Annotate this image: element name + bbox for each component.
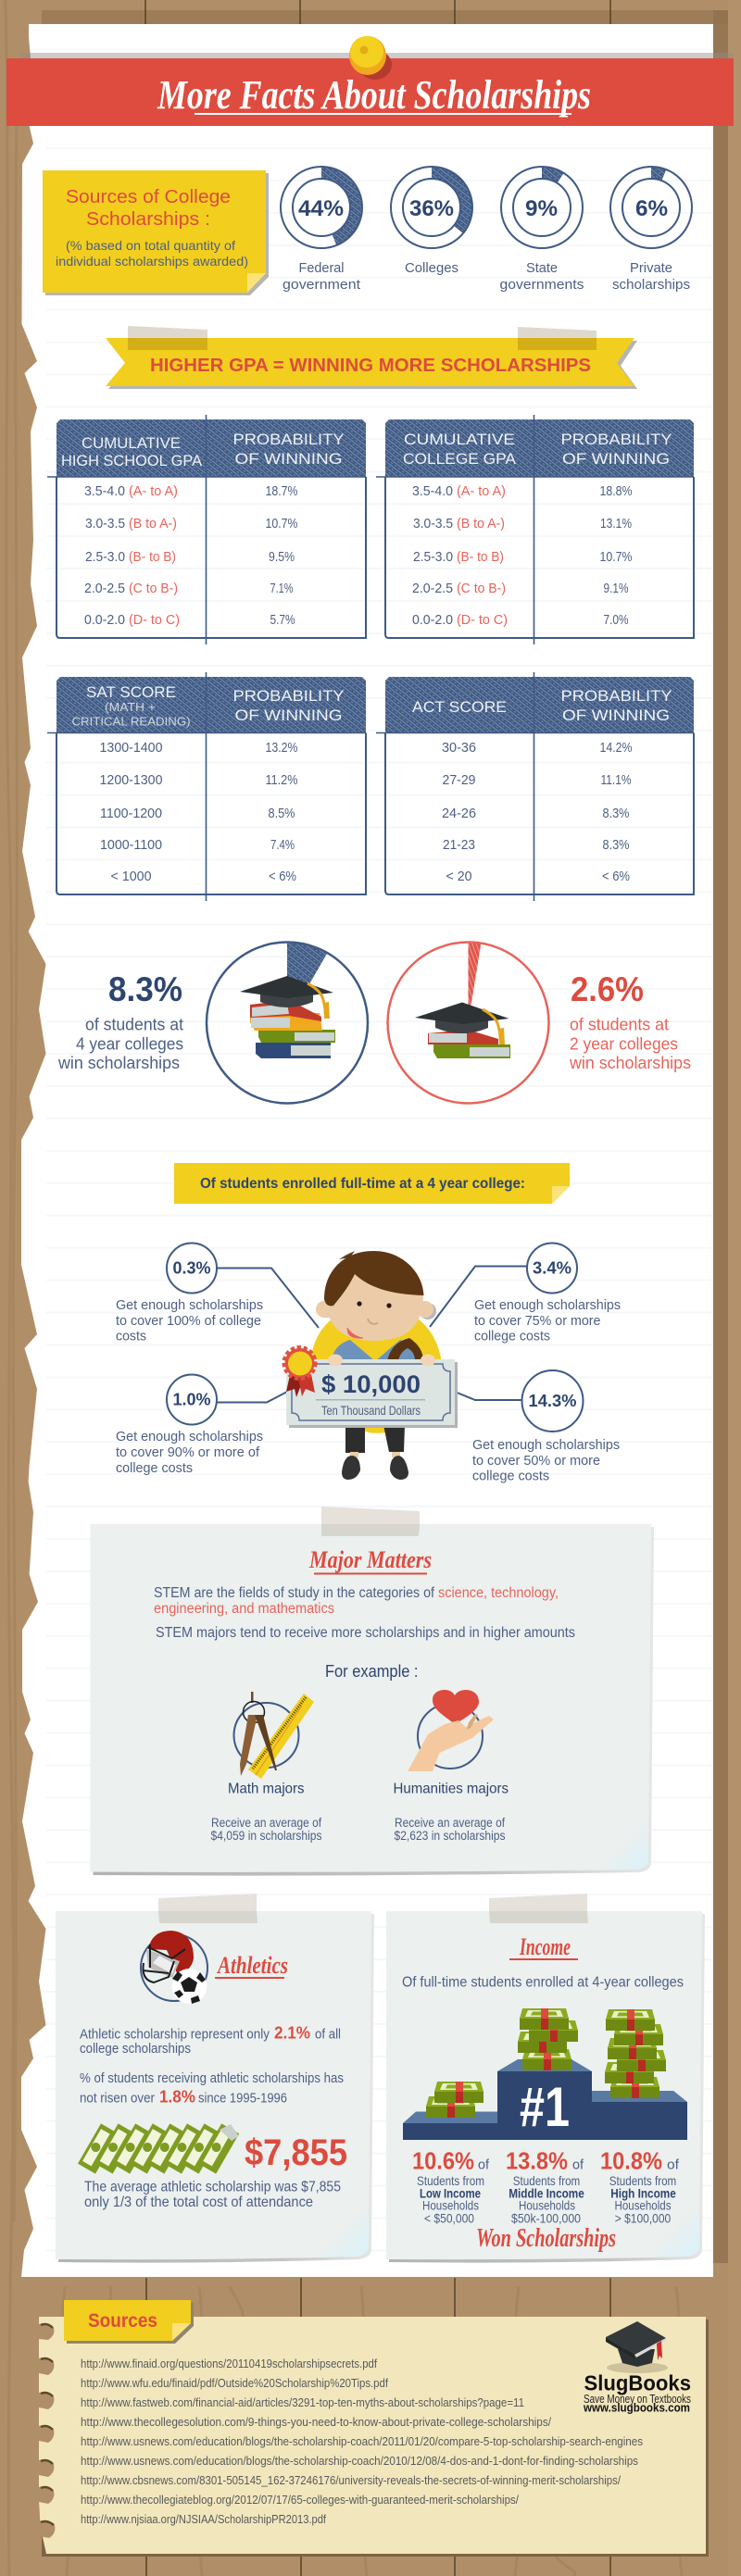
table: high school GPA: 2.0-2.5 — [84, 581, 125, 596]
text: humanities average — [395, 1816, 506, 1843]
stat: low income 10.6%: Low Income — [420, 2185, 481, 2200]
text: 2.1% of all scholarships: college scholarships — [80, 2042, 191, 2057]
table: ACT score: 27-29 — [443, 772, 476, 788]
source list: http://www.usnews.com/education/blogs/the-scholarship-coach/2010/12/08/4-dos-and-1-dont-for-finding-scholarships — [81, 2455, 638, 2468]
stat: middle income 13.8%: $50k-100,000 — [511, 2211, 581, 2226]
stat: high income 10.8%: Households — [615, 2198, 671, 2213]
logo: SlugBooks — [583, 2321, 691, 2415]
table: SAT score: OF WINNING — [235, 707, 343, 724]
table: SAT score: < 1000 — [111, 869, 152, 884]
stat: high income 10.8%: Students from — [609, 2173, 676, 2188]
logo: SlugBooks: SlugBooks — [584, 2370, 691, 2395]
callout: 14.3%: Get enough scholarships — [472, 1438, 620, 1453]
sources tag — [64, 2300, 194, 2344]
stat: middle income 13.8%: 13.8% — [506, 2146, 568, 2174]
table: high school GPA: 0.0-2.0 — [84, 612, 125, 628]
stat: high income 10.8%: > $100,000 — [615, 2211, 671, 2226]
stat: low income 10.6%: < $50,000 — [424, 2211, 474, 2226]
table: high school GPA: 3.5-4.0 — [84, 483, 125, 499]
table: high school GPA: HIGH SCHOOL GPA — [61, 452, 203, 469]
text: math average: Receive an average of — [211, 1816, 321, 1830]
text: not risen over 1.8%: not risen over — [80, 2091, 155, 2106]
table: college GPA: (B to A-) — [457, 516, 505, 531]
table: SAT score: 7.4% — [270, 837, 295, 853]
callout: 14.3%: 14.3% — [528, 1392, 576, 1410]
donut: federal government 44%: Federal — [298, 260, 345, 276]
text: average athletic scholarship: only 1/3 of the total cost of attendance — [84, 2195, 313, 2210]
stat: low income 10.6%: Students from — [417, 2173, 484, 2188]
table: college GPA: COLLEGE GPA — [403, 450, 517, 468]
stat: 8.3% of students at 4 year colleges: 8.3% — [108, 970, 182, 1008]
text: 2.1% of all scholarships: of all — [315, 2028, 341, 2043]
donut: private scholarships 6%: scholarships — [612, 277, 690, 293]
table: ACT score: 30-36 — [442, 740, 476, 756]
donut: colleges 36%: Colleges — [405, 260, 458, 276]
callout: 14.3%: to cover 50% or more — [472, 1454, 600, 1469]
donut: federal government 44% — [281, 167, 362, 293]
heading note: students enrolled full-time: Of students enrolled full-time at a 4 year college: — [200, 1176, 525, 1192]
table: ACT score: PROBABILITY — [561, 687, 672, 705]
callout: 1.0%: college costs — [116, 1461, 193, 1476]
pie: 4 year colleges with cap and books — [207, 942, 368, 1104]
table: SAT score: 13.2% — [265, 740, 298, 756]
text: not risen over 1.8%: % of students receiving athletic scholarships has — [80, 2071, 344, 2086]
table: ACT score — [376, 672, 694, 901]
panel: major matters — [91, 1507, 654, 1876]
table: high school GPA: (A- to A) — [129, 483, 178, 499]
callout: 1.0%: to cover 90% or more of — [116, 1445, 260, 1460]
stat: 2.6% of students at 2 year colleges: 2 year colleges — [570, 1035, 678, 1054]
table: high school GPA: (D- to C) — [129, 612, 180, 628]
table: high school GPA: (B to A-) — [129, 516, 177, 531]
text: humanities average: $2,623 in scholarships — [395, 1829, 506, 1843]
callout: 3.4%: college costs — [474, 1330, 550, 1344]
table: college GPA: 7.0% — [604, 612, 628, 628]
icon: two stacked books — [428, 1030, 510, 1058]
text: not risen over 1.8%: 1.8% — [159, 2087, 195, 2106]
stat: middle income 13.8%: Students from — [513, 2173, 580, 2188]
table: college GPA: 2.0-2.5 — [412, 581, 453, 596]
stat: middle income 13.8%: Middle Income — [509, 2185, 584, 2200]
icon: award ribbon — [285, 1348, 315, 1397]
table: ACT score: 8.3% — [602, 806, 630, 821]
table: high school GPA: PROBABILITY — [233, 431, 345, 448]
table: SAT score: 1000-1100 — [100, 837, 162, 853]
table: college GPA: (C to B-) — [457, 581, 506, 596]
table: SAT score: (MATH + — [105, 700, 156, 714]
illustration: student holding $10,000 check — [285, 1251, 458, 1480]
source list: http://www.wfu.edu/finaid/pdf/Outside%20Scholarship%20Tips.pdf — [81, 2377, 388, 2390]
note text: (% based on total quantity of — [66, 238, 235, 253]
label: math majors: Math majors — [228, 1782, 304, 1796]
panel: athletics — [56, 1894, 374, 2263]
STEM text: STEM are the fields of study in the categories of — [154, 1585, 435, 1601]
icon: compass and ruler — [233, 1692, 314, 1779]
subheading: Of full-time students enrolled at 4-year colleges — [402, 1974, 684, 1991]
stat: high income 10.8% — [600, 2146, 680, 2226]
callout: 0.3%: Get enough scholarships — [116, 1298, 263, 1313]
panel: sources of college scholarships note: Scholarships : — [86, 209, 210, 230]
table: college GPA: 3.0-3.5 — [413, 516, 453, 531]
table: SAT score: CRITICAL READING) — [72, 715, 191, 728]
icon: football helmet and soccer ball — [141, 1931, 207, 2004]
table: ACT score: 21-23 — [443, 837, 475, 853]
text: math average — [211, 1816, 322, 1843]
table: ACT score: 24-26 — [442, 806, 476, 821]
source list: http://www.njsiaa.org/NJSIAA/ScholarshipPR2013.pdf — [81, 2513, 326, 2526]
table: college GPA: PROBABILITY — [561, 431, 672, 448]
check: $ 10,000 — [321, 1370, 421, 1398]
table: high school GPA: 3.0-3.5 — [85, 516, 125, 531]
source list: http://www.thecollegiateblog.org/2012/07/17/65-colleges-with-guaranteed-merit-scholarships/ — [81, 2494, 519, 2507]
table: high school GPA: (B- to B) — [129, 549, 176, 565]
stat: 8.3% of students at 4 year colleges: of students at — [85, 1015, 183, 1033]
icon: fanned dollar bills — [78, 2123, 239, 2174]
table: high school GPA: 18.7% — [265, 483, 298, 499]
stat: low income 10.6%: Households — [422, 2198, 479, 2213]
panel: major matters: science, technology, — [438, 1585, 559, 1601]
icon: yellow push pin — [349, 36, 392, 80]
table: college GPA: 10.7% — [600, 549, 632, 565]
panel: income — [386, 1894, 705, 2263]
source list: http://www.fastweb.com/financial-aid/articles/3291-top-ten-myths-about-scholarships?page=11 — [81, 2396, 524, 2409]
panel: major matters: For example : — [325, 1662, 419, 1681]
ribbon heading: higher GPA — [106, 326, 637, 389]
table: ACT score: < 20 — [446, 869, 472, 884]
heading: Sources of College — [66, 187, 231, 207]
table: high school GPA: OF WINNING — [235, 450, 343, 468]
table: college GPA: 13.1% — [600, 516, 632, 531]
donut: federal government 44%: government — [283, 277, 361, 293]
text: 2.1% of all scholarships — [80, 2024, 341, 2057]
label: humanities majors: Humanities majors — [393, 1782, 509, 1796]
table: high school GPA: 5.7% — [270, 612, 295, 628]
table: college GPA: 2.5-3.0 — [413, 549, 453, 565]
icon: four stacked books — [250, 1000, 335, 1058]
icon: graduation cap — [415, 1002, 509, 1044]
stat: 2.6% of students at 2 year colleges: of students at — [570, 1015, 669, 1033]
stat: 2.6% of students at 2 year colleges — [569, 970, 691, 1072]
connector lines to student — [217, 1267, 527, 1402]
table: ACT score: < 6% — [602, 869, 630, 884]
panel: major matters: STEM majors tend to receive more scholarships and in higher amounts — [156, 1625, 575, 1641]
notebook holes — [39, 2323, 55, 2538]
source list: http://www.finaid.org/questions/20110419scholarshipsecrets.pdf — [81, 2357, 377, 2370]
stat: 2.6% of students at 2 year colleges: win scholarships — [569, 1054, 691, 1072]
table: SAT score: 1200-1300 — [100, 772, 163, 788]
text: math average: $4,059 in scholarships — [211, 1829, 322, 1843]
donut: private scholarships 6% — [610, 167, 692, 293]
heading note: students enrolled full-time — [174, 1163, 570, 1204]
table: college GPA: (B- to B) — [457, 549, 504, 565]
icon: graduation cap — [240, 976, 333, 1019]
donut: state governments 9% — [500, 167, 584, 293]
table: college GPA — [376, 415, 694, 644]
table: high school GPA: 10.7% — [265, 516, 298, 531]
table: college GPA: (A- to A) — [457, 483, 506, 499]
donut: state governments 9%: State — [526, 260, 558, 276]
donut: state governments 9%: 9% — [525, 196, 558, 221]
tape — [321, 1507, 420, 1536]
heading: Athletics — [216, 1952, 288, 1979]
stat: 2.6% of students at 2 year colleges: 2.6% — [571, 970, 644, 1008]
tape — [489, 1894, 588, 1923]
donut: private scholarships 6%: Private — [630, 260, 672, 276]
title: More Facts About Scholarships — [157, 72, 591, 118]
table: college GPA: 18.8% — [600, 483, 632, 499]
source list: http://www.cbsnews.com/8301-505145_162-37246176/university-reveals-the-secrets-of-winning-merit-scholarships/ — [81, 2474, 621, 2487]
table: high school GPA — [47, 415, 366, 644]
text: not risen over 1.8%: since 1995-1996 — [198, 2091, 287, 2106]
callout: 3.4%: to cover 75% or more — [474, 1314, 600, 1329]
callout: 1.0%: Get enough scholarships — [116, 1430, 263, 1444]
podium with #1: #1 — [520, 2076, 570, 2138]
text: average athletic scholarship — [84, 2180, 341, 2210]
table: college GPA: 3.5-4.0 — [412, 483, 453, 499]
stat: low income 10.6%: 10.6% — [412, 2146, 474, 2174]
text: not risen over 1.8% — [80, 2071, 344, 2106]
callout: 0.3%: 0.3% — [172, 1259, 211, 1278]
text: average athletic scholarship: The average athletic scholarship was $7,855 — [84, 2180, 341, 2195]
table: SAT score: 1100-1200 — [100, 806, 162, 821]
source list: http://www.thecollegesolution.com/9-things-you-need-to-know-about-private-college-scholarships/ — [81, 2416, 551, 2429]
podium with #1 — [403, 2059, 687, 2140]
source list: http://www.usnews.com/education/blogs/the-scholarship-coach/2011/01/20/compare-5-top-scholarship-search-engines — [81, 2435, 643, 2448]
stat: high income 10.8%: High Income — [610, 2185, 676, 2200]
table: college GPA: OF WINNING — [562, 450, 670, 468]
table: ACT score: OF WINNING — [562, 707, 670, 724]
stat: low income 10.6%: of — [478, 2157, 490, 2172]
heading: Income — [519, 1933, 571, 1960]
callout: 3.4% — [474, 1243, 621, 1344]
donut: state governments 9%: governments — [500, 277, 584, 293]
stat: 8.3% of students at 4 year colleges — [57, 970, 183, 1072]
stat: middle income 13.8%: Households — [519, 2198, 575, 2213]
table: SAT score: 11.2% — [265, 772, 298, 788]
check: Ten Thousand Dollars — [321, 1403, 421, 1418]
donut: federal government 44%: 44% — [298, 196, 344, 221]
stat: high income 10.8%: of — [667, 2157, 680, 2172]
callout: 3.4%: Get enough scholarships — [474, 1298, 621, 1313]
callout: 0.3% — [116, 1243, 263, 1344]
table: high school GPA: CUMULATIVE — [82, 434, 181, 452]
table: SAT score: 1300-1400 — [100, 740, 163, 756]
stat: low income 10.6% — [412, 2146, 490, 2226]
callout: 1.0% — [116, 1374, 263, 1476]
table: ACT score: 14.2% — [600, 740, 632, 756]
table: college GPA: 0.0-2.0 — [412, 612, 453, 628]
table: college GPA: (D- to C) — [457, 612, 508, 628]
logo: SlugBooks: Save Money on Textbooks — [584, 2393, 691, 2406]
callout: 3.4%: 3.4% — [533, 1259, 571, 1278]
stat: 8.3% of students at 4 year colleges: 4 year colleges — [76, 1035, 183, 1054]
stat: 8.3% of students at 4 year colleges: win scholarships — [57, 1054, 180, 1072]
table: ACT score: 11.1% — [600, 772, 632, 788]
icon: heart in hand — [408, 1690, 494, 1771]
icon: money stacks on podium — [426, 2008, 666, 2118]
source list — [81, 2357, 643, 2526]
table: SAT score: PROBABILITY — [233, 687, 345, 705]
text: humanities average: Receive an average of — [395, 1816, 505, 1830]
donut: colleges 36%: 36% — [409, 196, 454, 221]
heading: Major Matters — [308, 1546, 432, 1573]
table: SAT score: 8.5% — [269, 806, 295, 821]
callout: 14.3% — [472, 1370, 620, 1483]
panel: major matters: engineering, and mathematics — [154, 1601, 334, 1617]
table: ACT score: 8.3% — [602, 837, 630, 853]
heading: won scholarships: Won Scholarships — [476, 2224, 616, 2253]
sources tag: Sources — [88, 2310, 157, 2332]
table: high school GPA: 2.5-3.0 — [85, 549, 125, 565]
table: SAT score: < 6% — [269, 869, 296, 884]
ribbon heading: higher GPA: HIGHER GPA = WINNING MORE SCHOLARSHIPS — [150, 356, 591, 376]
check — [286, 1359, 458, 1428]
callout: 14.3%: college costs — [472, 1469, 549, 1483]
callout: 1.0%: 1.0% — [172, 1391, 211, 1409]
table: college GPA: 9.1% — [604, 581, 628, 596]
table: ACT score: ACT SCORE — [412, 698, 507, 716]
table: SAT score: SAT SCORE — [86, 683, 176, 701]
tape — [158, 1894, 257, 1923]
panel: sources of college scholarships note — [43, 170, 269, 295]
text: 2.1% of all scholarships: 2.1% — [274, 2024, 310, 2043]
callout: 0.3%: costs — [116, 1330, 146, 1344]
title banner — [6, 36, 734, 126]
callout: 0.3%: to cover 100% of college — [116, 1314, 261, 1329]
stat: high income 10.8%: 10.8% — [600, 2146, 662, 2174]
donut: private scholarships 6%: 6% — [635, 196, 668, 221]
donut: colleges 36% — [391, 167, 472, 276]
table: high school GPA: (C to B-) — [129, 581, 178, 596]
panel: sources — [39, 2300, 709, 2557]
logo: SlugBooks: www.slugbooks.com — [583, 2402, 690, 2415]
stat: middle income 13.8%: of — [572, 2157, 584, 2172]
panel: sources of college scholarships note: individual scholarships awarded) — [56, 254, 248, 269]
stat: $7,855: $7,855 — [245, 2132, 347, 2173]
table: SAT score — [47, 672, 366, 901]
stat: middle income 13.8% — [506, 2146, 584, 2226]
text: 2.1% of all scholarships: Athletic scholarship represent only — [80, 2028, 270, 2043]
table: high school GPA: 9.5% — [269, 549, 295, 565]
table: college GPA: CUMULATIVE — [404, 431, 515, 448]
pie: 2 year colleges with cap and books — [387, 943, 548, 1104]
table: high school GPA: 7.1% — [270, 581, 293, 596]
